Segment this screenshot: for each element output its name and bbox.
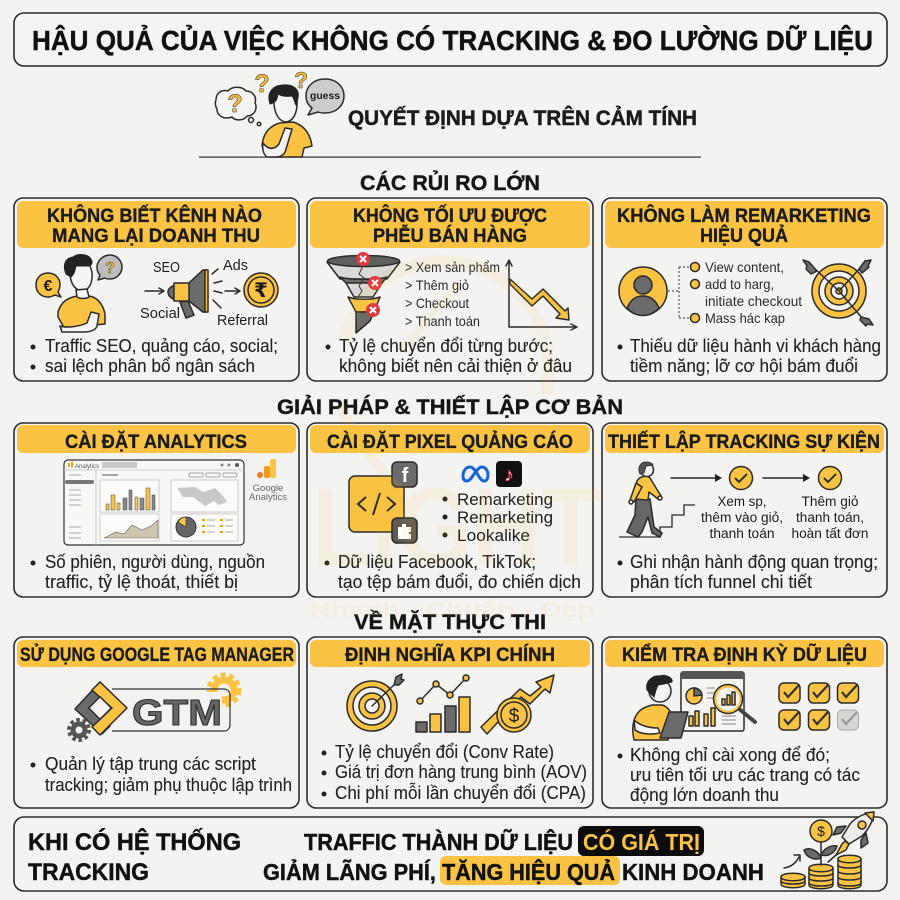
icon: broken funnel — [327, 252, 400, 333]
list: funnel steps — [405, 259, 500, 329]
text block: Không chỉ cài xong để đó; — [630, 744, 830, 765]
heading: CÀI ĐẶT PIXEL QUẢNG CÁO — [327, 430, 573, 453]
text block: không biết nên cải thiện ở đâu — [339, 355, 572, 376]
arrows and checkpoints: thanh toán — [710, 526, 774, 541]
chart: traffic channels megaphone — [140, 257, 278, 329]
icon: person with bubbles: ? — [105, 260, 115, 277]
callout: outcomes — [263, 826, 764, 885]
icon: person with bubbles: € — [44, 278, 53, 295]
text block — [618, 335, 881, 376]
panel: google tag manager — [14, 637, 299, 808]
section heading: execution: VỀ MẶT THỰC THI — [354, 609, 546, 634]
chart: traffic channels megaphone: Ads — [223, 257, 248, 274]
list: behaviours: Mass hác kạp — [705, 310, 785, 326]
callout: outcomes: TĂNG HIỆU QUẢ — [442, 857, 615, 885]
text block — [324, 551, 581, 592]
panel: periodic data review — [602, 637, 887, 808]
text block: traffic, tỷ lệ thoát, thiết bị — [45, 571, 238, 592]
chart: traffic channels megaphone: Referral — [217, 312, 268, 329]
text block — [322, 741, 587, 803]
watermark: Nhanh - Chuẩn - Đẹp — [310, 599, 595, 622]
icon: google analytics logo: Analytics — [249, 492, 287, 503]
text block: Giá trị đơn hàng trung bình (AOV) — [335, 761, 587, 782]
text block: Traffic SEO, quảng cáo, social; — [45, 335, 278, 356]
section heading: solutions: GIẢI PHÁP & THIẾT LẬP CƠ BẢN — [277, 394, 623, 419]
heading: ĐỊNH NGHĨA KPI CHÍNH — [345, 643, 555, 666]
list: pixel uses: Remarketing — [457, 490, 553, 509]
icon: coins, plant and rocket: $ — [817, 823, 825, 839]
icon: GTM logo — [69, 675, 239, 740]
text block: Thiếu dữ liệu hành vi khách hàng — [630, 335, 881, 356]
list: behaviours: initiate checkout — [705, 293, 802, 309]
chart: traffic channels megaphone: Social — [140, 305, 180, 322]
arrows and checkpoints: thêm vào giỏ, — [701, 510, 783, 525]
text block — [30, 551, 265, 592]
title — [14, 13, 887, 66]
text block — [30, 335, 278, 376]
section heading: risks: CÁC RỦI RO LỚN — [360, 170, 540, 195]
heading: with tracking system — [28, 828, 241, 886]
text block: Tỷ lệ chuyển đổi (Conv Rate) — [335, 741, 554, 762]
text block: Tỷ lệ chuyển đổi từng bước; — [339, 335, 553, 356]
heading: MANG LẠI DOANH THU — [52, 225, 260, 247]
arrows and checkpoints: Thêm giỏ — [802, 494, 858, 509]
heading — [617, 203, 871, 247]
list: funnel steps: > Thêm giỏ — [405, 277, 469, 293]
arrows and checkpoints: hoàn tất đơn — [792, 526, 868, 541]
list: funnel steps: > Xem sản phẩm — [405, 259, 500, 275]
heading: KHÔNG BIẾT KÊNH NÀO — [47, 203, 262, 227]
text block: Số phiên, người dùng, nguồn — [45, 551, 265, 572]
text block — [30, 753, 292, 795]
text block — [618, 551, 878, 592]
chart: analytics dashboard — [64, 460, 244, 545]
icon: code pixel — [349, 462, 417, 543]
panel: conclusion banner — [14, 812, 887, 891]
icon: customer avatar — [619, 267, 667, 316]
icon: google analytics logo — [249, 459, 287, 503]
panel: ad pixel — [307, 423, 593, 597]
illustration: thinking person: ? — [294, 67, 308, 93]
icon: meta and tiktok: ♪ — [504, 465, 514, 486]
panel: event tracking — [602, 423, 887, 597]
chart: falling conversion — [506, 260, 577, 330]
panel: unknown revenue channel — [14, 198, 299, 381]
panel: install analytics — [14, 423, 299, 597]
arrows and checkpoints: thanh toán, — [796, 510, 864, 525]
panel: define KPIs — [307, 637, 593, 808]
icon: google analytics logo: Google — [253, 483, 283, 494]
panel: funnel not optimized — [307, 198, 593, 381]
callout: outcomes: GIẢM LÃNG PHÍ, — [263, 857, 436, 885]
arrows and checkpoints: Xem sp, — [718, 494, 766, 509]
text block — [618, 744, 860, 805]
callout: outcomes: TRAFFIC THÀNH DỮ LIỆU — [304, 828, 573, 855]
illustration: thinking person — [215, 67, 344, 157]
list: funnel steps: > Thanh toán — [405, 313, 480, 329]
heading: with tracking system: TRACKING — [28, 859, 149, 886]
arrows and checkpoints — [671, 466, 868, 541]
text block — [326, 335, 572, 376]
text block: Quản lý tập trung các script — [45, 753, 256, 774]
text block: tracking; giảm phụ thuộc lập trình — [45, 774, 292, 795]
list: pixel uses: Remarketing — [457, 508, 553, 527]
heading: KIỂM TRA ĐỊNH KỲ DỮ LIỆU — [622, 642, 867, 666]
text block: tiềm năng; lỡ cơ hội bám đuổi — [630, 355, 858, 376]
text block: Dữ liệu Facebook, TikTok; — [338, 551, 536, 572]
illustration: thinking person: ? — [227, 90, 243, 118]
text block: tạo tệp bám đuổi, đo chiến dịch — [338, 571, 581, 592]
icon: growth coin: $ — [509, 706, 520, 727]
heading: PHỄU BÁN HÀNG — [373, 224, 527, 247]
chart: traffic channels megaphone: ₹ — [254, 280, 268, 302]
list: behaviours: View content, — [705, 259, 784, 275]
icon: person climbing stairs — [619, 462, 695, 537]
illustration: thinking person: ? — [254, 70, 270, 98]
list: funnel steps: > Checkout — [405, 295, 469, 311]
icon: code pixel: f — [402, 465, 409, 487]
chart: KPI bars and line — [416, 675, 470, 732]
icon: GTM logo: GTM — [132, 692, 222, 733]
callout: outcomes: CÓ GIÁ TRỊ — [583, 828, 700, 855]
icon: person with bubbles — [36, 255, 122, 332]
heading: with tracking system: KHI CÓ HỆ THỐNG — [28, 828, 241, 856]
text block: Ghi nhận hành động quan trọng; — [630, 551, 878, 572]
icon: target with arrows — [803, 260, 873, 326]
chart: traffic channels megaphone: SEO — [153, 259, 180, 276]
heading: THIẾT LẬP TRACKING SỰ KIỆN — [608, 429, 880, 453]
subheading: gut decision: QUYẾT ĐỊNH DỰA TRÊN CẢM TÍNH — [348, 105, 697, 130]
list: pixel uses — [442, 490, 553, 545]
list: pixel uses: Lookalike — [457, 526, 530, 545]
list: behaviours — [668, 259, 802, 326]
icon: meta and tiktok — [463, 461, 522, 487]
icon: coins, plant and rocket — [781, 812, 874, 889]
watermark — [310, 261, 600, 622]
text block: Chi phí mỗi lần chuyển đổi (CPA) — [335, 782, 586, 803]
panel: ineffective remarketing — [602, 198, 887, 381]
watermark: LIGHT — [312, 466, 600, 589]
text block: ưu tiên tối ưu các trang có tác — [630, 764, 860, 785]
text block: động lớn doanh thu — [630, 784, 779, 805]
checklist — [779, 683, 858, 730]
chart: analytics dashboard: Analytics — [75, 464, 99, 470]
icon: person reviewing dashboard — [633, 672, 755, 740]
list: behaviours: add to harg, — [705, 276, 774, 292]
heading: HIỆU QUẢ — [700, 223, 788, 247]
text block: phân tích funnel chi tiết — [630, 571, 812, 592]
heading: CÀI ĐẶT ANALYTICS — [65, 430, 247, 453]
heading: SỬ DỤNG GOOGLE TAG MANAGER — [20, 642, 294, 666]
heading: KHÔNG LÀM REMARKETING — [617, 203, 871, 227]
icon: growth coin — [481, 675, 554, 734]
heading: KHÔNG TỐI ƯU ĐƯỢC — [353, 203, 547, 227]
heading — [353, 203, 547, 247]
icon: KPI target — [347, 674, 404, 731]
text block: sai lệch phân bổ ngân sách — [45, 355, 255, 376]
illustration: thinking person: guess — [310, 90, 340, 102]
heading — [47, 203, 262, 247]
callout: outcomes: KINH DOANH — [622, 859, 764, 885]
